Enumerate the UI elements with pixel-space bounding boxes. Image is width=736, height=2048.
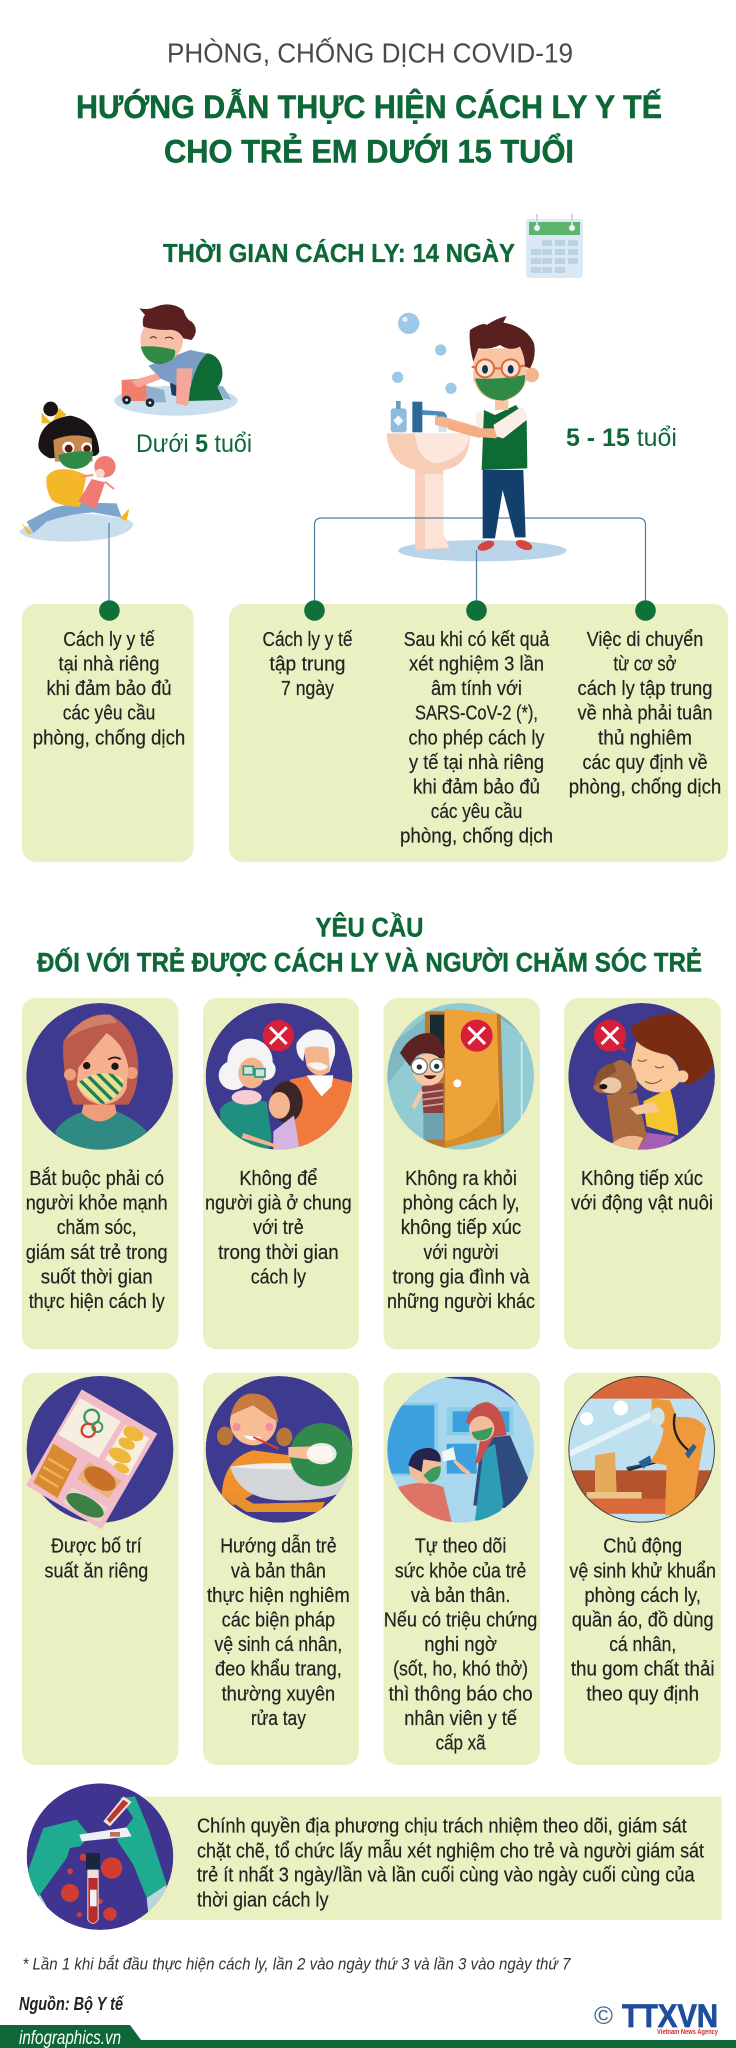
text: home isolation: các yêu cầu	[63, 703, 155, 725]
illustration: washbasin	[387, 313, 567, 561]
logo: TTXVN: Vietnam News Agency	[657, 2029, 718, 2036]
text: self monitoring: nghi ngờ	[424, 1634, 497, 1656]
text: moving home rules: từ cơ sở	[614, 654, 676, 676]
text: moving home rules: Việc di chuyển	[587, 629, 703, 651]
text: no elderly: cách ly	[251, 1266, 306, 1288]
text: self monitoring: Tự theo dõi	[415, 1536, 506, 1558]
card: no elderly	[203, 998, 359, 1350]
text: stay in room: Không ra khỏi	[405, 1168, 517, 1190]
text: hygiene: đeo khẩu trang,	[215, 1659, 342, 1681]
text: no pets: Không tiếp xúc	[581, 1168, 703, 1190]
text: after three negative tests: y tế tại nhà riêng	[409, 752, 544, 774]
panel: local authority responsibility	[27, 1783, 722, 1930]
illustration: crawling toddler with toy truck	[114, 304, 238, 416]
panel: under 5 guidance	[22, 600, 194, 862]
text: centralized isolation 7 days: Cách ly y tế	[262, 629, 352, 651]
text: caregiver	[26, 1167, 168, 1313]
text: after three negative tests: SARS-CoV-2 (*),	[415, 703, 538, 725]
text: centralized isolation 7 days: 7 ngày	[281, 678, 334, 700]
text: no elderly	[205, 1168, 352, 1288]
text: moving home rules: cách ly tập trung	[578, 678, 712, 700]
card: self monitoring	[383, 1373, 540, 1765]
text: home isolation: khi đảm bảo đủ	[46, 678, 172, 700]
text: moving home rules: các quy định về	[582, 752, 708, 774]
quarantine duration heading: THỜI GIAN CÁCH LY: 14 NGÀY	[163, 238, 515, 268]
marker dot 3	[635, 600, 656, 621]
text: home isolation	[33, 629, 185, 749]
text: hygiene: và bản thân	[231, 1560, 326, 1582]
text: moving home rules: thủ nghiêm	[598, 727, 692, 749]
text: moving home rules	[569, 629, 721, 798]
subtitle: PHÒNG, CHỐNG DỊCH COVID-19	[167, 36, 573, 68]
text: after three negative tests: Sau khi có kết quả	[404, 629, 550, 651]
text: authority responsibility: trẻ ít nhất 3 ngày/lần và lần cuối cùng vào ngày cuối cùng của	[197, 1865, 695, 1887]
text: no elderly: Không để	[239, 1168, 317, 1190]
text: authority responsibility: Chính quyền địa phương chịu trách nhiệm theo dõi, giám sát	[197, 1816, 687, 1838]
text: moving home rules: về nhà phải tuân	[578, 703, 712, 725]
text: disinfection	[569, 1536, 716, 1705]
text: after three negative tests: âm tính với	[431, 678, 522, 700]
text: separate meals: suất ăn riêng	[44, 1560, 148, 1582]
text: after three negative tests: phòng, chống dịch	[400, 826, 553, 848]
text: self monitoring: sức khỏe của trẻ	[395, 1560, 526, 1582]
footer bar	[0, 2025, 736, 2048]
text: separate meals	[44, 1536, 148, 1582]
card: stay in room	[384, 998, 540, 1350]
title	[76, 89, 662, 170]
text: after three negative tests: cho phép cách ly	[408, 727, 544, 749]
icon: nurse taking child's temperature	[383, 1376, 534, 1523]
icon: woman with striped mask	[26, 1003, 173, 1151]
icon: girl brushing teeth and washing hands	[206, 1376, 353, 1523]
text: authority responsibility	[197, 1816, 704, 1912]
text: hygiene	[207, 1535, 350, 1730]
text: self monitoring: và bản thân.	[411, 1585, 510, 1607]
source: Nguồn: Bộ Y tế	[19, 1994, 125, 2014]
icon: child hugging dog	[568, 1003, 715, 1151]
illustration: boy washing hands	[435, 316, 539, 553]
panel: 5 to 15 guidance	[229, 600, 728, 862]
text: caregiver: Bắt buộc phải có	[29, 1167, 164, 1190]
text: after three negative tests: xét nghiệm 3 lần	[409, 654, 544, 676]
text: moving home rules: phòng, chống dịch	[569, 776, 721, 798]
heading: requirements: YÊU CẦU	[316, 912, 424, 943]
text: hygiene: rửa tay	[251, 1708, 306, 1730]
text: caregiver: suốt thời gian	[41, 1266, 153, 1288]
icon: grandparents and child	[206, 1003, 353, 1151]
footnote: * Lần 1 khi bắt đầu thực hiện cách ly, lần 2 vào ngày thứ 3 và lần 3 vào ngày thứ 7	[22, 1954, 571, 1973]
text: stay in room: trong gia đình và	[392, 1266, 530, 1288]
text: self monitoring: cấp xã	[436, 1732, 486, 1754]
heading: requirements	[37, 912, 702, 978]
text: hygiene: các biện pháp	[222, 1610, 335, 1632]
text: disinfection: vệ sinh khử khuẩn	[569, 1560, 716, 1582]
title: HƯỚNG DẪN THỰC HIỆN CÁCH LY Y TẾ	[76, 89, 662, 125]
label: under 5 years old: Dưới 5 tuổi	[136, 430, 252, 458]
text: stay in room: với người	[424, 1242, 498, 1264]
text: no pets: với động vật nuôi	[571, 1193, 713, 1215]
text: disinfection: Chủ động	[603, 1536, 682, 1558]
text: authority responsibility: thời gian cách ly	[197, 1890, 328, 1912]
text: hygiene: thường xuyên	[222, 1683, 335, 1705]
text: home isolation: tại nhà riêng	[58, 654, 160, 676]
text: self monitoring: thì thông báo cho	[389, 1683, 533, 1705]
icon: worker in protective suit disinfecting	[567, 1375, 717, 1523]
text: home isolation: Cách ly y tế	[63, 629, 155, 651]
marker dot	[99, 600, 120, 621]
text: no elderly: với trẻ	[253, 1217, 304, 1239]
text: hygiene: Hướng dẫn trẻ	[220, 1535, 337, 1558]
text: hygiene: thực hiện nghiêm	[207, 1585, 350, 1607]
text: self monitoring	[384, 1536, 537, 1754]
text: after three negative tests: khi đảm bảo đủ	[413, 776, 540, 798]
card: disinfection	[564, 1373, 721, 1765]
icon: gloved hands with test tube and virus	[27, 1783, 173, 1930]
text: stay in room: những người khác	[387, 1291, 535, 1313]
icon: boy behind door	[387, 1003, 534, 1150]
text: disinfection: cá nhân,	[609, 1634, 676, 1656]
logo: TTXVN: TTXVN	[622, 1998, 718, 2034]
illustration: girl with doll	[19, 402, 133, 542]
text: centralized isolation 7 days: tập trung	[270, 654, 346, 676]
connector lines	[109, 518, 646, 610]
card: healthy caregiver	[22, 998, 178, 1350]
text: self monitoring: nhân viên y tế	[404, 1708, 517, 1730]
text: caregiver: giám sát trẻ trong	[26, 1242, 168, 1264]
text: disinfection: quần áo, đồ dùng	[572, 1610, 714, 1632]
text: stay in room: không tiếp xúc	[401, 1217, 521, 1239]
icon: calendar	[526, 214, 583, 278]
text: home isolation: phòng, chống dịch	[33, 727, 185, 749]
card: personal hygiene	[203, 1373, 359, 1765]
text: stay in room	[387, 1168, 535, 1313]
text: no elderly: người già ở chung	[205, 1193, 352, 1215]
text: disinfection: thu gom chất thải	[571, 1659, 715, 1681]
text: hygiene: vệ sinh cá nhân,	[215, 1634, 342, 1656]
icon: food tray	[26, 1376, 173, 1529]
marker dot 2	[466, 600, 487, 621]
text: disinfection: phòng cách ly,	[584, 1585, 701, 1607]
text: no pets	[571, 1168, 713, 1215]
text: stay in room: phòng cách ly,	[402, 1193, 520, 1215]
text: disinfection: theo quy định	[586, 1683, 699, 1705]
text: self monitoring: Nếu có triệu chứng	[384, 1610, 537, 1632]
logo: TTXVN: ©	[594, 2002, 614, 2030]
text: after three negative tests	[400, 629, 553, 848]
text: centralized isolation 7 days	[262, 629, 352, 700]
marker dot 1	[304, 600, 325, 621]
text: no elderly: trong thời gian	[218, 1242, 339, 1264]
text: caregiver: chăm sóc,	[57, 1217, 137, 1239]
text: self monitoring: (sốt, ho, khó thở)	[393, 1659, 528, 1681]
text: caregiver: người khỏe mạnh	[26, 1193, 168, 1215]
card: separate meals	[22, 1373, 178, 1765]
text: separate meals: Được bố trí	[51, 1536, 142, 1558]
label: 5 to 15 years old: 5 - 15 tuổi	[566, 424, 677, 452]
title: CHO TRẺ EM DƯỚI 15 TUỔI	[164, 134, 574, 170]
logo: TTXVN	[594, 1998, 718, 2036]
card: no pets	[564, 998, 721, 1350]
text: after three negative tests: các yêu cầu	[431, 801, 522, 823]
text: caregiver: thực hiện cách ly	[29, 1291, 165, 1313]
